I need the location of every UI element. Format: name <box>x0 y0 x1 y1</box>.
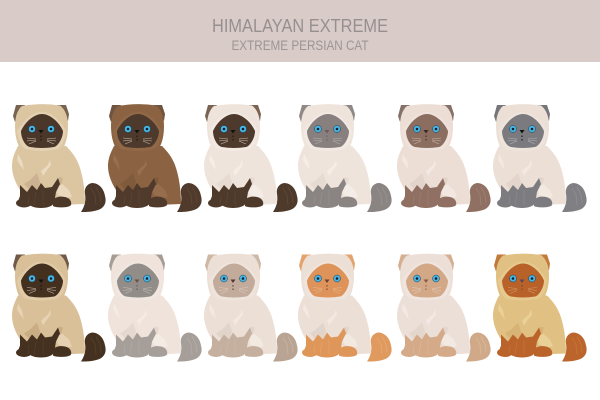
cat: dark brown <box>108 104 202 212</box>
cat: seal point on white <box>204 104 298 212</box>
cat: taupe tabby point <box>204 254 298 362</box>
cat: seal point on cream <box>12 104 106 212</box>
title: HIMALAYAN EXTREME <box>212 16 388 36</box>
cat: grey point <box>298 104 392 212</box>
cat: brown-lilac point <box>397 104 491 212</box>
cat: silver tabby point <box>108 254 202 362</box>
cat: seal point on golden <box>12 254 106 362</box>
cat: flame point <box>298 254 392 362</box>
cat: cream tabby point <box>397 254 491 362</box>
cat: blue point <box>493 104 587 212</box>
header banner <box>0 0 600 62</box>
cat: red point on golden <box>493 254 587 362</box>
subtitle: EXTREME PERSIAN CAT <box>232 38 368 53</box>
